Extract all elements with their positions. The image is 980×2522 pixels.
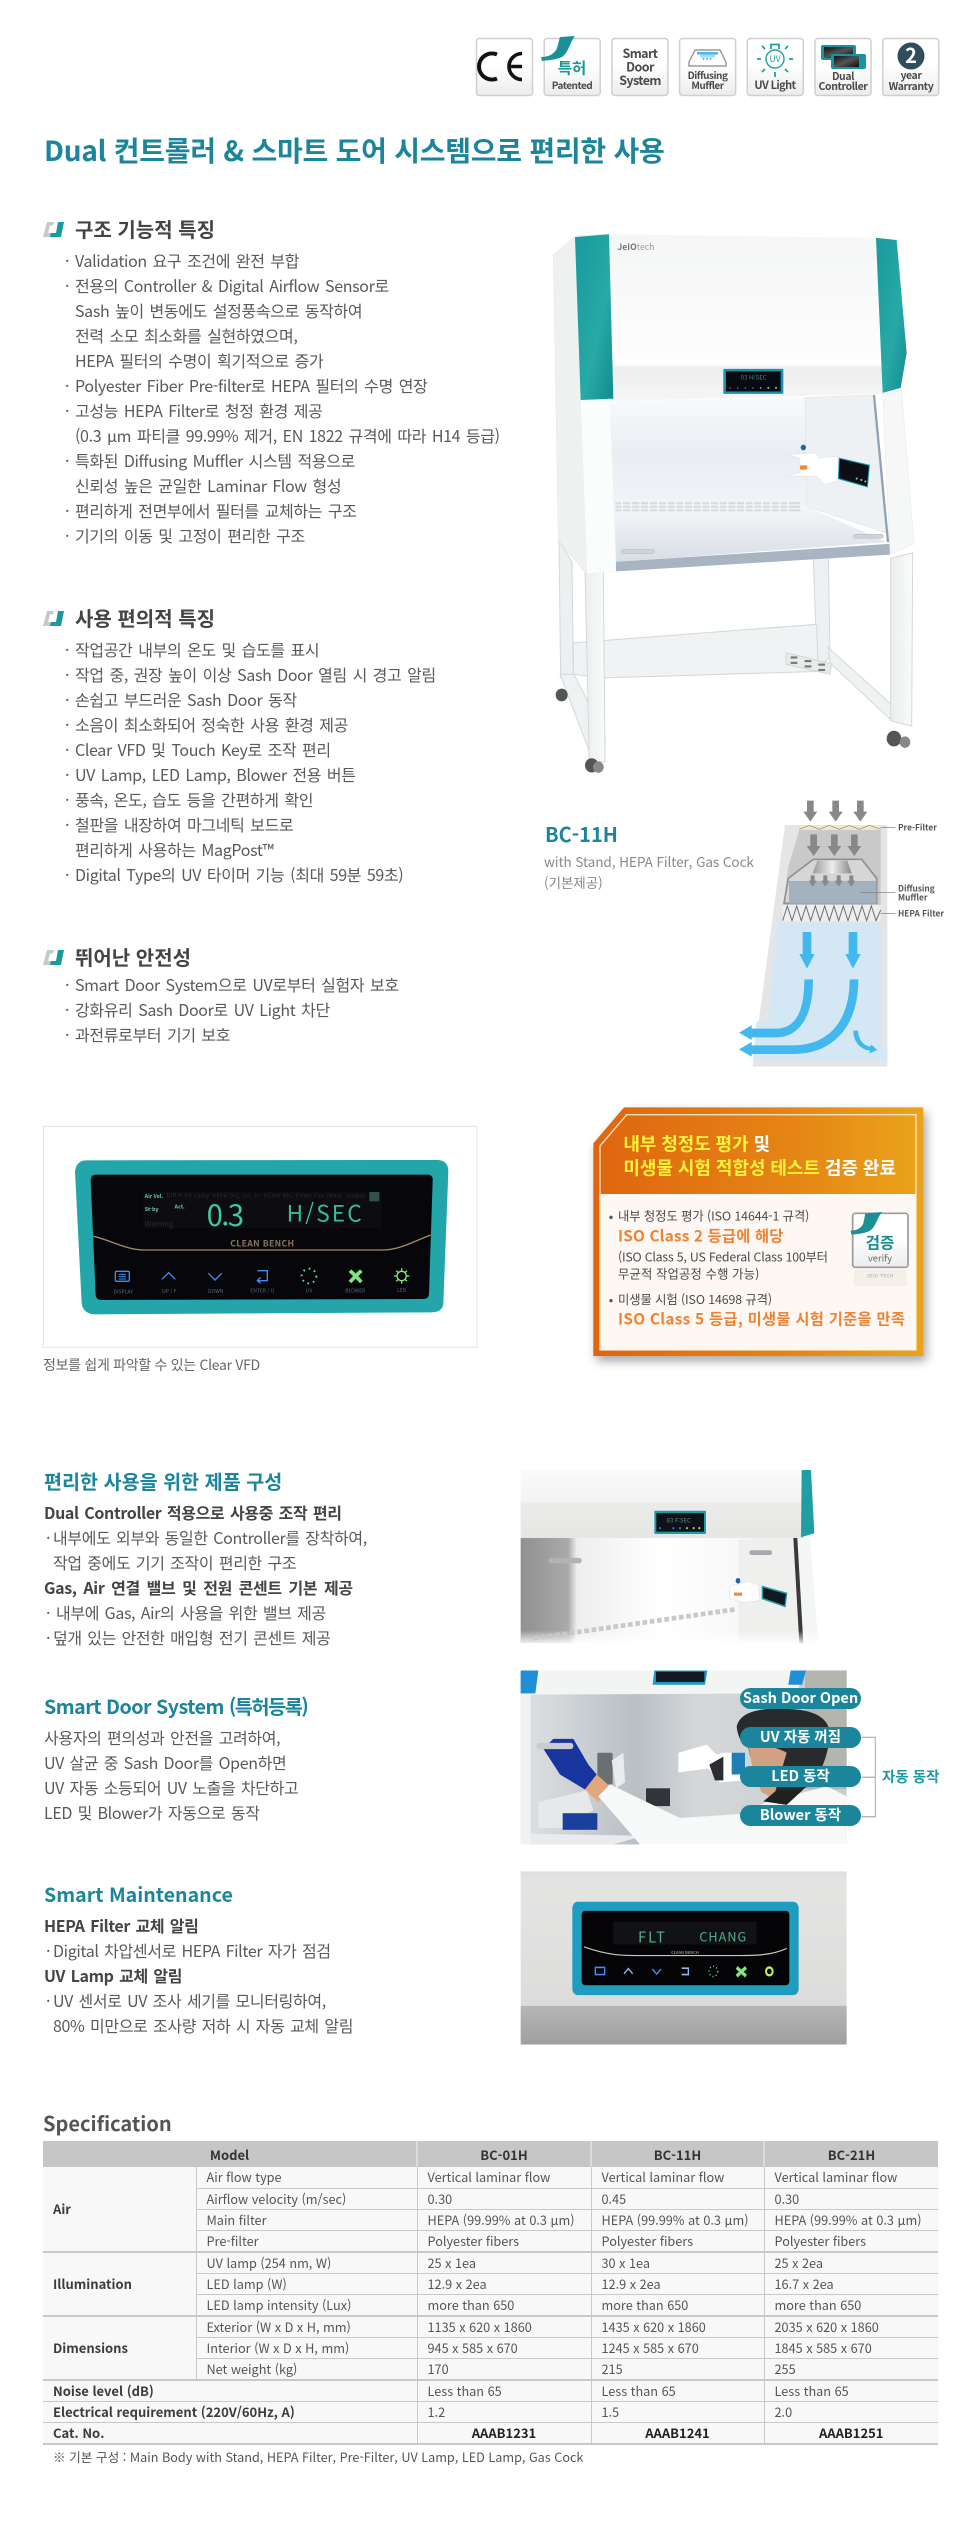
interior side wall: [805, 395, 887, 533]
text block: ·: [46, 1624, 50, 1648]
icon: CE mark: [476, 38, 532, 96]
button labels: [114, 1287, 407, 1295]
photo 2: [521, 1670, 875, 1844]
spec table: Air: [53, 2199, 71, 2218]
spec table: 1245 x 585 x 670: [602, 2338, 699, 2357]
label: LED on: LED 동작: [771, 1765, 830, 1786]
text block: UV 자동 소등되어 UV 노출을 차단하고: [44, 1775, 298, 1799]
work surface: [615, 506, 887, 562]
inner frame: [600, 1115, 916, 1350]
display readout: Warning: [145, 1218, 174, 1229]
icon: smart door system: Door: [626, 56, 655, 76]
heading: 구조 기능적 특징: [75, 214, 215, 243]
feature list: ·: [65, 786, 69, 810]
button labels: DOWN: [208, 1288, 224, 1295]
hood front: [609, 234, 883, 401]
text block: [44, 1725, 298, 1824]
feature list: ·: [65, 996, 69, 1020]
item: cleanliness: ISO Class 2 등급에 해당: [618, 1224, 783, 1246]
icon: dual controller: [815, 38, 871, 96]
casters: [556, 689, 910, 773]
display readout: Air Vel.: [144, 1192, 163, 1200]
spec table: HEPA (99.99% at 0.3 μm): [602, 2210, 748, 2229]
HEPA filter: [783, 905, 881, 922]
icon: section marker: [43, 222, 64, 237]
spec table: LED lamp intensity (Lux): [206, 2295, 351, 2314]
spec table: BC-01H: [480, 2144, 528, 2164]
label: blower on: [740, 1805, 861, 1826]
spec table: Vertical laminar flow: [774, 2167, 897, 2186]
spec table: 1.5: [602, 2402, 619, 2421]
feature list: ·: [65, 862, 69, 886]
spec table: AAAB1251: [819, 2423, 883, 2442]
spec table: 1.2: [428, 2402, 445, 2421]
button labels: BLOWER: [345, 1287, 366, 1294]
verify badge: 검증: [866, 1230, 894, 1253]
icon: 2 year warranty: year: [900, 68, 922, 83]
feature list: 전용의 Controller & Digital Airflow Sensor로: [75, 273, 389, 297]
controller frame: [75, 1160, 448, 1314]
icon: section marker: [43, 950, 64, 965]
spec table: AAAB1231: [472, 2423, 536, 2442]
spec table: [43, 2141, 938, 2445]
spec table: 945 x 585 x 670: [428, 2338, 518, 2357]
display readout: Act.: [174, 1203, 185, 1211]
feature list: ·: [65, 273, 69, 297]
feature list: 강화유리 Sash Door로 UV Light 차단: [75, 996, 330, 1020]
photo 3: CLEAN BENCH: [671, 1950, 699, 1956]
spec table: Polyester fibers: [774, 2231, 866, 2250]
feature list: 고성능 HEPA Filter로 청정 환경 제공: [75, 398, 323, 422]
text block: LED 및 Blower가 자동으로 동작: [44, 1800, 260, 1824]
spec table: 1845 x 585 x 670: [774, 2338, 872, 2357]
photo 3: FLT: [638, 1927, 667, 1948]
spec table: Net weight (kg): [206, 2359, 297, 2378]
feature list: ·: [65, 686, 69, 710]
text block: ·: [46, 1988, 50, 2012]
feature list: ·: [65, 1022, 69, 1046]
icon: 2 year warranty: Warranty: [889, 79, 934, 94]
text block: ·: [46, 1524, 50, 1548]
label leader lines: [860, 827, 895, 913]
spec table: Exterior (W x D x H, mm): [206, 2317, 351, 2336]
button labels: DISPLAY: [114, 1288, 133, 1295]
button icons: [115, 1268, 409, 1284]
photo 3: CHANG: [699, 1926, 747, 1945]
spec table: BC-11H: [654, 2144, 701, 2164]
spec table: 1435 x 620 x 1860: [602, 2317, 706, 2336]
item: microbial: [609, 1290, 905, 1330]
callout: validation box: [590, 1106, 932, 1368]
photo 1: 83 F:SEC: [667, 1516, 691, 1525]
front steel lip: [616, 544, 890, 571]
icon: 2 year warranty: 2: [905, 40, 917, 69]
text block: 내부에도 외부와 동일한 Controller를 장착하여,: [53, 1524, 367, 1548]
caption: VFD: 정보를 쉽게 파악할 수 있는 Clear VFD: [43, 1355, 260, 1375]
icon: section marker: [43, 611, 64, 626]
feature list: 소음이 최소화되어 정숙한 사용 환경 제공: [75, 712, 348, 736]
feature list: ·: [65, 762, 69, 786]
feature list: 작업 중, 권장 높이 이상 Sash Door 열림 시 경고 알림: [75, 662, 436, 686]
spec table: Air flow type: [206, 2167, 282, 2186]
display readout: H/SEC: [287, 1195, 362, 1228]
heading: 뛰어난 안전성: [75, 942, 191, 971]
feature list: 작업공간 내부의 온도 및 습도를 표시: [75, 636, 319, 660]
pre-filter: [799, 825, 881, 830]
feature list: 편리하게 사용하는 MagPost™: [75, 836, 274, 860]
heading: specification: Specification: [43, 2108, 172, 2137]
text block: Dual Controller 적용으로 사용중 조작 편리: [44, 1500, 342, 1524]
feature list: [65, 636, 436, 886]
caption: model description: (기본제공): [544, 872, 603, 892]
stand frame: [559, 540, 913, 762]
item: cleanliness: (ISO Class 5, US Federal Class 100부터: [618, 1247, 828, 1265]
text block: 80% 미만으로 조사량 저하 시 자동 교체 알림: [53, 2012, 353, 2036]
spec table: 0.30: [428, 2189, 452, 2208]
feature list: HEPA 필터의 수명이 획기적으로 증가: [75, 348, 323, 372]
spec table: more than 650: [428, 2295, 514, 2314]
spec table: Airflow velocity (m/sec): [206, 2189, 346, 2208]
spec table: Dimensions: [53, 2338, 128, 2357]
feature list: ·: [65, 736, 69, 760]
blue airflow arrows: [739, 932, 877, 1057]
spec table: more than 650: [602, 2295, 688, 2314]
display readout: [143, 1192, 382, 1235]
text block: HEPA Filter 교체 알림: [44, 1912, 199, 1936]
feature list: ·: [65, 636, 69, 660]
item: microbial: ISO Class 5 등급, 미생물 시험 기준을 만족: [618, 1308, 905, 1330]
diagram labels: [898, 821, 944, 919]
label: sash door open: Sash Door Open: [743, 1687, 858, 1708]
display readout: 0.3: [207, 1193, 244, 1235]
feature list: UV Lamp, LED Lamp, Blower 전용 버튼: [75, 762, 356, 786]
feature list: ·: [65, 712, 69, 736]
spec table: Interior (W x D x H, mm): [206, 2338, 349, 2357]
label: UV auto off: [740, 1727, 861, 1748]
item: cleanliness: 무균적 작업공정 수행 가능): [618, 1264, 759, 1282]
spec table: HEPA (99.99% at 0.3 μm): [774, 2210, 922, 2229]
verify badge: JEIO TECH: [866, 1273, 894, 1279]
spec table: 25 x 1ea: [428, 2253, 476, 2272]
icon: smart door system: Smart: [623, 43, 659, 62]
heading: Smart Door System (특허등록): [44, 1691, 307, 1720]
feature list: 기기의 이동 및 고정이 편리한 구조: [75, 523, 305, 547]
feature list: Sash 높이 변동에도 설정풍속으로 동작하여: [75, 298, 362, 322]
icon: smart door system: [612, 38, 668, 96]
airflow diagram: [739, 800, 944, 1066]
icon: patented: 특허: [558, 56, 586, 78]
feature list: Clear VFD 및 Touch Key로 조작 편리: [75, 736, 331, 760]
golden divider: [93, 1235, 431, 1250]
icon: diffusing muffler: Muffler: [691, 77, 725, 92]
teal side panel left: [575, 234, 613, 400]
feature list: ·: [65, 373, 69, 397]
grey intake arrows: [803, 801, 867, 887]
diagram labels: HEPA Filter: [898, 907, 944, 919]
title: Dual 컨트롤러 & 스마트 도어 시스템으로 편리한 사용: [44, 130, 664, 170]
controller: [723, 369, 783, 394]
text block: [44, 1912, 353, 2036]
text block: 내부에 Gas, Air의 사용을 위한 밸브 제공: [56, 1600, 326, 1624]
feature list: ·: [65, 812, 69, 836]
feature list: ·: [65, 662, 69, 686]
spec table: Model: [210, 2144, 249, 2164]
controller face: [91, 1175, 433, 1300]
front column right: [883, 390, 914, 555]
plenum chamber: [783, 830, 881, 905]
section: structure features: [43, 214, 500, 547]
verify badge: verify: [868, 1250, 892, 1264]
feature list: Validation 요구 조건에 완전 부합: [75, 248, 299, 272]
spec table: Vertical laminar flow: [428, 2167, 550, 2186]
spec table: 1135 x 620 x 1860: [428, 2317, 532, 2336]
label: LED on: [740, 1766, 861, 1787]
icon: diffusing muffler: [680, 38, 736, 96]
text block: Digital 차압센서로 HEPA Filter 자가 점검: [53, 1938, 331, 1962]
bracket slots: [791, 656, 825, 671]
spec table: Electrical requirement (220V/60Hz, A): [53, 2402, 295, 2421]
text block: 작업 중에도 기기 조작이 편리한 구조: [53, 1550, 296, 1574]
spec table: HEPA (99.99% at 0.3 μm): [428, 2210, 574, 2229]
diffusing muffler: [784, 859, 877, 904]
section: safety: [43, 942, 399, 1046]
product illustration: clean bench BC-11H: [553, 234, 914, 773]
feature list: (0.3 μm 파티클 99.99% 제거, EN 1822 규격에 따라 H14 등급): [75, 423, 500, 447]
feature list: ·: [65, 448, 69, 472]
spec table: 255: [774, 2359, 796, 2378]
verify badge: [851, 1212, 908, 1286]
spec table: Noise level (dB): [53, 2381, 154, 2400]
status pills bracket: [862, 1737, 875, 1817]
footnote: ※ 기본 구성 : Main Body with Stand, HEPA Filter, Pre-Filter, UV Lamp, LED Lamp, Gas Cock: [53, 2447, 583, 2466]
spec table: 2.0: [774, 2402, 792, 2421]
display readout: Diff.P UV Lamp HEPA Org.sol. H⁺ HCOH NH₃ Filter Fan Temp. Humid.: [167, 1193, 367, 1200]
spec table: 12.9 x 2ea: [602, 2274, 661, 2293]
feature list: 손쉽고 부드러운 Sash Door 동작: [75, 686, 297, 710]
cabinet side panel: [553, 234, 617, 574]
feature icon row: [476, 36, 940, 96]
body panel: [601, 1194, 916, 1350]
icon: UV light: UV: [770, 53, 781, 65]
spec table: 25 x 2ea: [774, 2253, 823, 2272]
feature list: ·: [65, 523, 69, 547]
text block: 사용자의 편의성과 안전을 고려하여,: [44, 1725, 280, 1749]
section: smart maintenance: [44, 1879, 353, 2036]
spec table: 16.7 x 2ea: [774, 2274, 834, 2293]
heading: 사용 편의적 특징: [75, 603, 215, 632]
photo: dual controller interior: [520, 1470, 876, 2044]
feature list: 풍속, 온도, 습도 등을 간편하게 확인: [75, 786, 313, 810]
feature list: 특화된 Diffusing Muffler 시스템 적용으로: [75, 448, 355, 472]
text block: [44, 1500, 367, 1648]
feature list: 과전류로부터 기기 보호: [75, 1022, 230, 1046]
header text: 내부 청정도 평가 및: [623, 1131, 770, 1157]
header text: [623, 1131, 896, 1181]
feature list: 신뢰성 높은 균일한 Laminar Flow 형성: [75, 473, 341, 497]
spec table: AAAB1241: [645, 2423, 710, 2442]
spec table: Vertical laminar flow: [602, 2167, 724, 2186]
icon: dual controller: Controller: [819, 79, 868, 94]
gas cock and inner controller: [787, 445, 869, 487]
spec table: 0.30: [774, 2189, 799, 2208]
spec table: Less than 65: [602, 2381, 676, 2400]
caption: model name: BC-11H: [545, 819, 618, 848]
section: smart door system: [44, 1691, 308, 1824]
spec table: Polyester fibers: [428, 2231, 519, 2250]
caption: model description: [544, 851, 754, 892]
display readout: St-by: [145, 1205, 158, 1213]
text block: ·: [46, 1938, 50, 1962]
glass sash edge: [874, 395, 888, 542]
spec table: 0.45: [602, 2189, 626, 2208]
icon: UV light: [747, 38, 803, 96]
feature list: ·: [65, 248, 69, 272]
spec table: 215: [602, 2359, 623, 2378]
spec table: Pre-filter: [206, 2231, 259, 2250]
panel: Clear VFD display photo: [42, 1126, 478, 1348]
spec table: 2035 x 620 x 1860: [774, 2317, 879, 2336]
icon: UV light: UV Light: [754, 77, 797, 93]
heading: Smart Maintenance: [44, 1879, 233, 1908]
text block: UV 센서로 UV 조사 세기를 모니터링하여,: [53, 1988, 326, 2012]
icon: patented: [541, 36, 600, 96]
spec table: BC-21H: [828, 2144, 875, 2164]
spec table: 30 x 1ea: [602, 2253, 650, 2272]
spec table: Cat. No.: [53, 2423, 104, 2442]
feature list: ·: [65, 498, 69, 522]
front column left: [581, 399, 616, 574]
feature list: ·: [65, 398, 69, 422]
caption: model description: with Stand, HEPA Filter, Gas Cock: [544, 851, 754, 871]
spec table: Polyester fibers: [602, 2231, 693, 2250]
diagram labels: Pre-Filter: [898, 821, 937, 833]
spec table: UV lamp (254 nm, W): [206, 2253, 331, 2272]
feature list: Polyester Fiber Pre-filter로 HEPA 필터의 수명 연장: [75, 373, 427, 397]
spec table: more than 650: [774, 2295, 861, 2314]
header text: 미생물 시험 적합성 테스트 검증 완료: [623, 1155, 896, 1181]
spec table: Less than 65: [428, 2381, 502, 2400]
text block: Gas, Air 연결 밸브 및 전원 콘센트 기본 제공: [44, 1574, 353, 1598]
brand logo: JeIOtech: [617, 241, 654, 253]
feature list: 편리하게 전면부에서 필터를 교체하는 구조: [75, 498, 357, 522]
feature list: Smart Door System으로 UV로부터 실험자 보호: [75, 972, 399, 996]
controller: 03 H/SEC: [741, 372, 767, 381]
spec table: Illumination: [53, 2274, 132, 2293]
text block: ·: [46, 1600, 50, 1624]
spec table: Main filter: [206, 2210, 266, 2229]
feature list: 철판을 내장하여 마그네틱 보드로: [75, 812, 293, 836]
handles: [621, 534, 883, 554]
spec table: 170: [428, 2359, 449, 2378]
text block: UV Lamp 교체 알림: [44, 1962, 182, 1986]
photo 3: [521, 1871, 847, 2045]
item: microbial: 미생물 시험 (ISO 14698 규격): [618, 1290, 772, 1308]
icon: 2 year warranty: [883, 38, 939, 96]
feature list: 전력 소모 최소화를 실현하였으며,: [75, 323, 298, 347]
button labels: UV: [306, 1288, 312, 1295]
icon: diffusing muffler: ▾▾▾: [702, 56, 713, 62]
feature list: ·: [65, 972, 69, 996]
feature list: [65, 972, 399, 1046]
diagram labels: Diffusing: [898, 882, 935, 894]
section: product configuration: [44, 1466, 367, 1648]
interior back wall: [609, 398, 807, 514]
photo 1: [521, 1470, 819, 1644]
icon: diffusing muffler: Diffusing: [688, 67, 728, 82]
label: UV auto off: UV 자동 꺼짐: [760, 1726, 841, 1747]
spec table: LED lamp (W): [206, 2274, 287, 2293]
teal side panel right: [876, 238, 907, 393]
icon: dual controller: Dual: [832, 69, 855, 84]
label: automatic operation: 자동 동작: [882, 1766, 939, 1787]
icon: patented: Patented: [552, 77, 592, 92]
text block: 덮개 있는 안전한 매입형 전기 콘센트 제공: [53, 1624, 330, 1648]
icon: smart door system: System: [619, 70, 661, 89]
cabinet housing: [753, 825, 887, 1067]
feature list: Digital Type의 UV 타이머 기능 (최대 59분 59초): [75, 862, 403, 886]
button labels: ENTER / U: [250, 1288, 275, 1295]
feature list: [65, 248, 500, 547]
button labels: LED: [397, 1287, 407, 1294]
clean air zone: [753, 922, 887, 1061]
diagram labels: Muffler: [898, 892, 928, 904]
label: blower on: Blower 동작: [760, 1804, 841, 1825]
item: cleanliness: [609, 1207, 828, 1282]
spec table: 12.9 x 2ea: [428, 2274, 487, 2293]
vent slots: [615, 502, 800, 511]
item: cleanliness: 내부 청정도 평가 (ISO 14644-1 규격): [618, 1207, 809, 1225]
clean bench label: CLEAN BENCH: [230, 1237, 294, 1249]
spec table: Less than 65: [774, 2381, 849, 2400]
section: usability features: [43, 603, 436, 886]
heading: 편리한 사용을 위한 제품 구성: [44, 1466, 282, 1495]
button labels: UP / F: [162, 1288, 177, 1295]
text block: UV 살균 중 Sash Door를 Open하면: [44, 1750, 286, 1774]
